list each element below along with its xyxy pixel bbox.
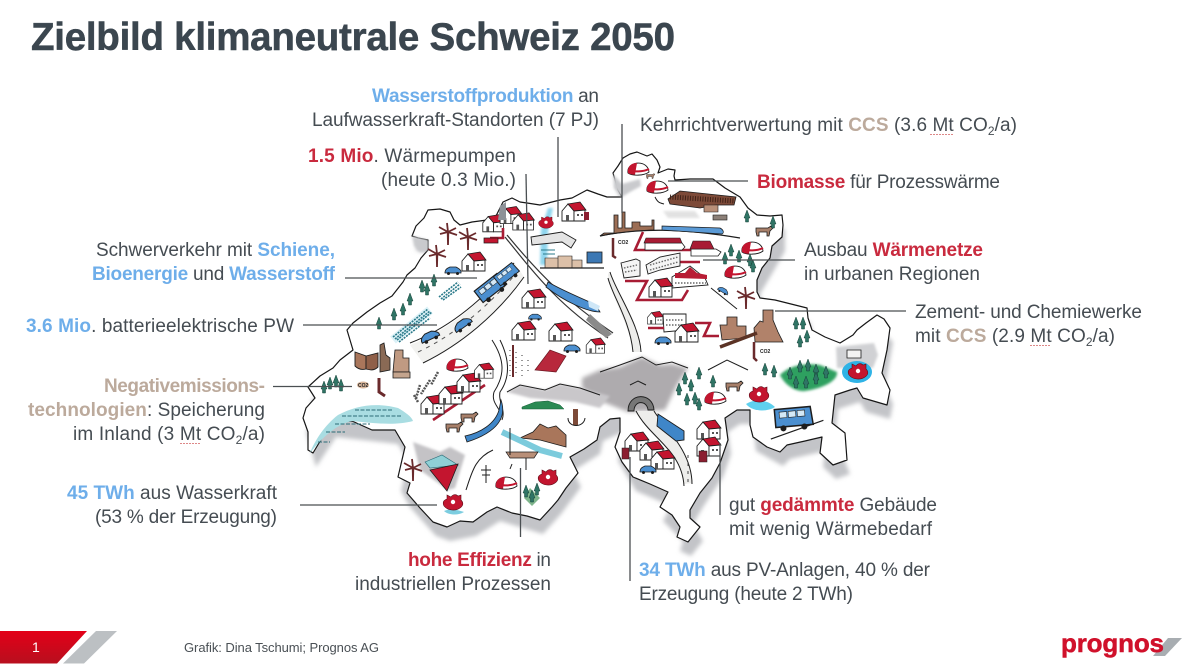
text: cement and chemical plants: 2 [1086, 335, 1093, 349]
icon: hydrogen production at run-of-river plant [531, 208, 604, 268]
icon: central houses with heat network [510, 289, 605, 380]
text: negative emissions: /a) [242, 424, 265, 445]
icon: trees on the Jura [321, 274, 437, 393]
prognos logo: prognos [1061, 628, 1164, 658]
text: hydropower: 45 TWh aus Wasserkraft [67, 483, 278, 504]
icon: waste incineration factory: CO2 [618, 240, 628, 246]
leader lines [273, 124, 906, 581]
icon: solar roof houses [622, 432, 675, 474]
text: hydropower [67, 483, 278, 528]
text: efficiency: industriellen Prozessen [355, 574, 551, 595]
icon: district heating network with buildings [621, 232, 721, 300]
text: cement and chemical plants: Zement- und Chemiewerke [915, 302, 1142, 323]
text: insulated buildings [729, 495, 937, 540]
icon: hydrogen bus [474, 262, 523, 305]
icon: electric cars [419, 316, 474, 345]
icon: Lake Geneva [310, 405, 413, 453]
text: cement and chemical plants [915, 302, 1142, 349]
icon: cement and chemical plant [720, 310, 783, 361]
icon: houses with pipe Mittelland [421, 363, 494, 420]
icon: biogas dome and crops [414, 359, 468, 402]
icon: solar fields [393, 282, 461, 342]
icon: cows central [446, 412, 478, 432]
text: hydrogen production: Laufwasserkraft-Standorten (7 PJ) [312, 110, 599, 131]
text: heat pumps: 1.5 Mio. Wärmepumpen [308, 146, 516, 167]
text: hydrogen production [312, 86, 599, 131]
text: waste incineration CCS: Kehrrichtverwertung mit CCS (3.6 Mt CO [640, 115, 988, 136]
text: cement and chemical plants: mit CCS (2.9 Mt CO [915, 326, 1086, 347]
icon: power line, dome and trees in Valais [466, 450, 558, 506]
text: heat pumps: (heute 0.3 Mio.) [381, 170, 516, 191]
text: biomass: Biomasse für Prozesswärme [757, 172, 1000, 193]
icon: tunnel [628, 397, 654, 411]
text: photovoltaics: Erzeugung (heute 2 TWh) [639, 584, 853, 605]
text: cement and chemical plants: /a) [1093, 326, 1115, 347]
icon: house with heat pump [562, 202, 589, 221]
icon: forest strip and geothermal [522, 401, 585, 426]
icon: farm cow and trees north east [744, 210, 776, 236]
text: photovoltaics: 34 TWh aus PV-Anlagen, 40 % der [639, 560, 931, 581]
icon: trees east [793, 317, 810, 347]
text: negative emissions: 2 [236, 433, 243, 447]
icon: biomass plant [663, 191, 736, 220]
text: photovoltaics [639, 560, 931, 605]
title: Zielbild klimaneutrale Schweiz 2050 [31, 16, 675, 59]
text: negative emissions [28, 376, 265, 447]
icon: refinery negative emissions [355, 343, 410, 396]
icon: refinery negative emissions: CO2 [358, 383, 368, 389]
icon: insulated houses at Gotthard [697, 420, 721, 462]
icon: car and turbine [711, 286, 755, 309]
icon: electric bus east [768, 405, 825, 439]
icon: road west of district [608, 272, 641, 352]
text: insulated buildings: mit wenig Wärmebedarf [729, 519, 933, 540]
icon: forest [762, 359, 837, 391]
icon: industrial plant with efficient processes [502, 424, 566, 470]
grey shade on northern border [412, 236, 428, 252]
text: heavy transport: Bioenergie und Wasserstoff [92, 264, 336, 285]
text: heavy transport: Schwerverkehr mit Schiene, [96, 240, 335, 261]
text: efficiency: hohe Effizienz in [408, 550, 551, 571]
text: insulated buildings: gut gedämmte Gebäude [729, 495, 937, 516]
footer page marker [0, 631, 117, 664]
icon: motorway with vehicles [410, 262, 524, 363]
icon: biogas domes [628, 163, 668, 204]
icon: wind turbines north [428, 223, 477, 267]
map shadow [306, 166, 893, 556]
footer page marker: 1 [32, 639, 40, 655]
text: district heating: in urbanen Regionen [804, 264, 980, 285]
icon: waste incineration factory [600, 212, 740, 258]
icon: train in the north [662, 226, 723, 234]
icon: house with car [445, 252, 486, 275]
text: heavy transport [92, 240, 336, 285]
text: hydrogen production: Wasserstoffproduktion an [372, 86, 599, 107]
icon: railway and train [505, 235, 613, 338]
text: district heating: Ausbau Wärmenetze [804, 240, 983, 261]
text: waste incineration CCS: /a) [995, 115, 1017, 136]
icon: river and train [465, 340, 508, 442]
icon: valley trees dome and cow [676, 367, 743, 410]
icon: Valais reservoir and waterfall [413, 442, 465, 491]
icon: turbine and gear in Valais [404, 459, 464, 515]
text: negative emissions: im Inland (3 Mt CO [73, 424, 235, 445]
text: battery electric cars: 3.6 Mio. batterieelektrische PW [26, 316, 294, 337]
text: negative emissions: technologien: Speicherung [28, 400, 265, 421]
icon: small hydro gear [746, 387, 775, 410]
icon: buildings with pipes and car [647, 311, 719, 345]
text: waste incineration CCS: 2 [988, 124, 995, 138]
icon: dam with lake east [836, 343, 878, 383]
map outline [303, 152, 890, 542]
grey shade at Lake Constance [613, 174, 641, 197]
icon: town with solar facade and pipes [483, 202, 534, 243]
source credit: Grafik: Dina Tschumi; Prognos AG [184, 640, 379, 655]
text: negative emissions: Negativemissions- [104, 376, 265, 397]
icon: central alps mountains [507, 357, 748, 412]
icon: cement and chemical plant: CO2 [760, 349, 770, 355]
text: heat pumps [308, 146, 516, 191]
text: efficiency [355, 550, 551, 595]
icon: domes and trees at district heating [722, 242, 763, 278]
text: hydropower: (53 % der Erzeugung) [95, 507, 277, 528]
text: district heating [804, 240, 983, 285]
icon: Gotthard road with bus [636, 411, 692, 486]
map of Switzerland [303, 152, 893, 556]
